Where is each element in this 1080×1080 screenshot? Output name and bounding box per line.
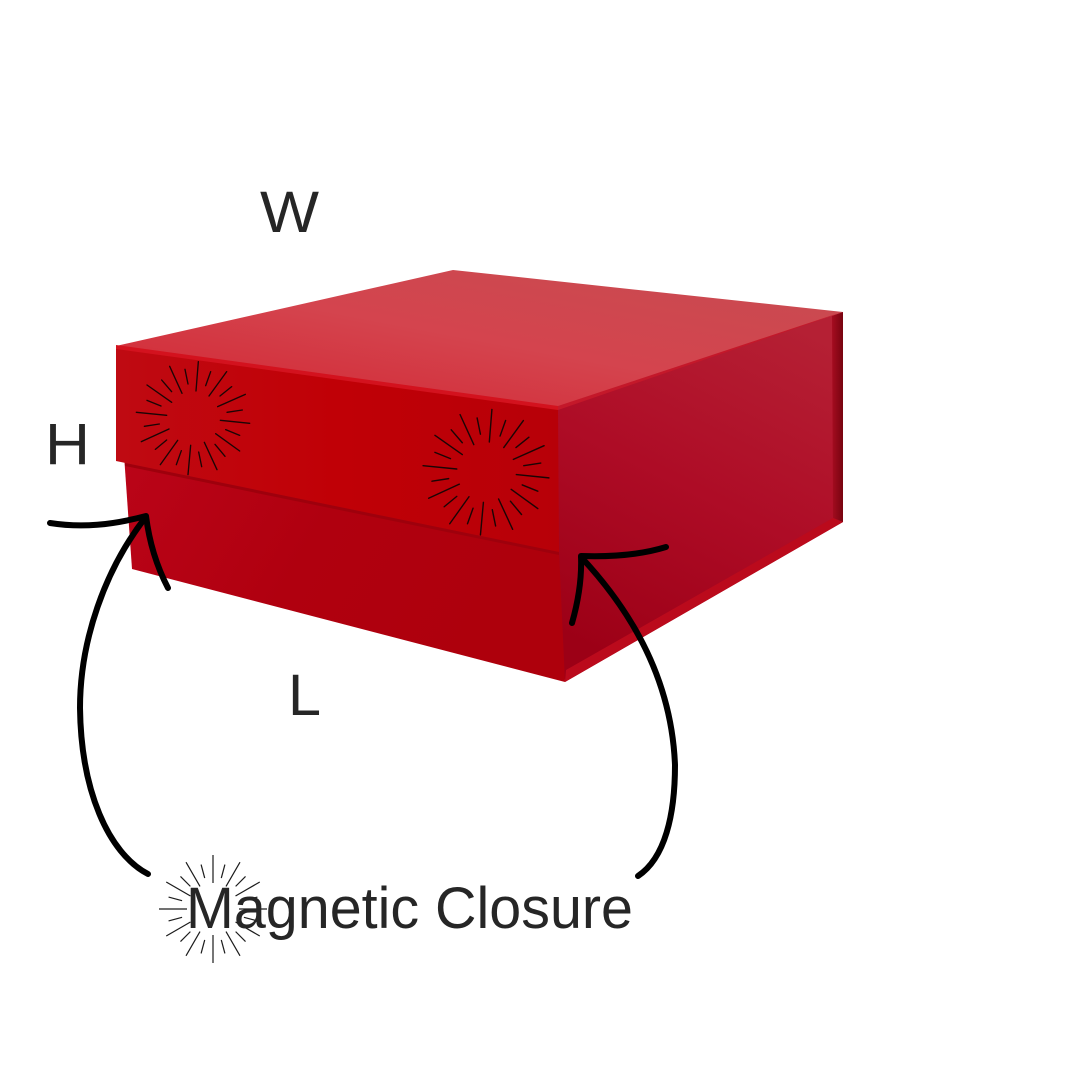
box top face [116, 270, 843, 408]
box lower front face [124, 455, 565, 682]
label: L: L [288, 663, 321, 728]
label: W: W [260, 180, 319, 245]
box lid front face [116, 346, 559, 552]
sunburst on lid left [136, 362, 250, 475]
sunburst behind caption [159, 855, 267, 963]
side top edge [558, 312, 843, 410]
lid bottom shadow [125, 463, 559, 555]
label: H: H [45, 412, 90, 477]
caption: Magnetic Closure: Magnetic Closure [186, 876, 633, 941]
red gift box [116, 270, 843, 682]
arrow: left [50, 516, 168, 874]
lid top edge highlight [116, 345, 558, 410]
arrow: right [572, 547, 675, 876]
sunburst on lid right [423, 409, 549, 535]
box right side face [552, 312, 843, 682]
side panel dark spine [832, 312, 843, 522]
side panel bottom edge [565, 518, 843, 682]
